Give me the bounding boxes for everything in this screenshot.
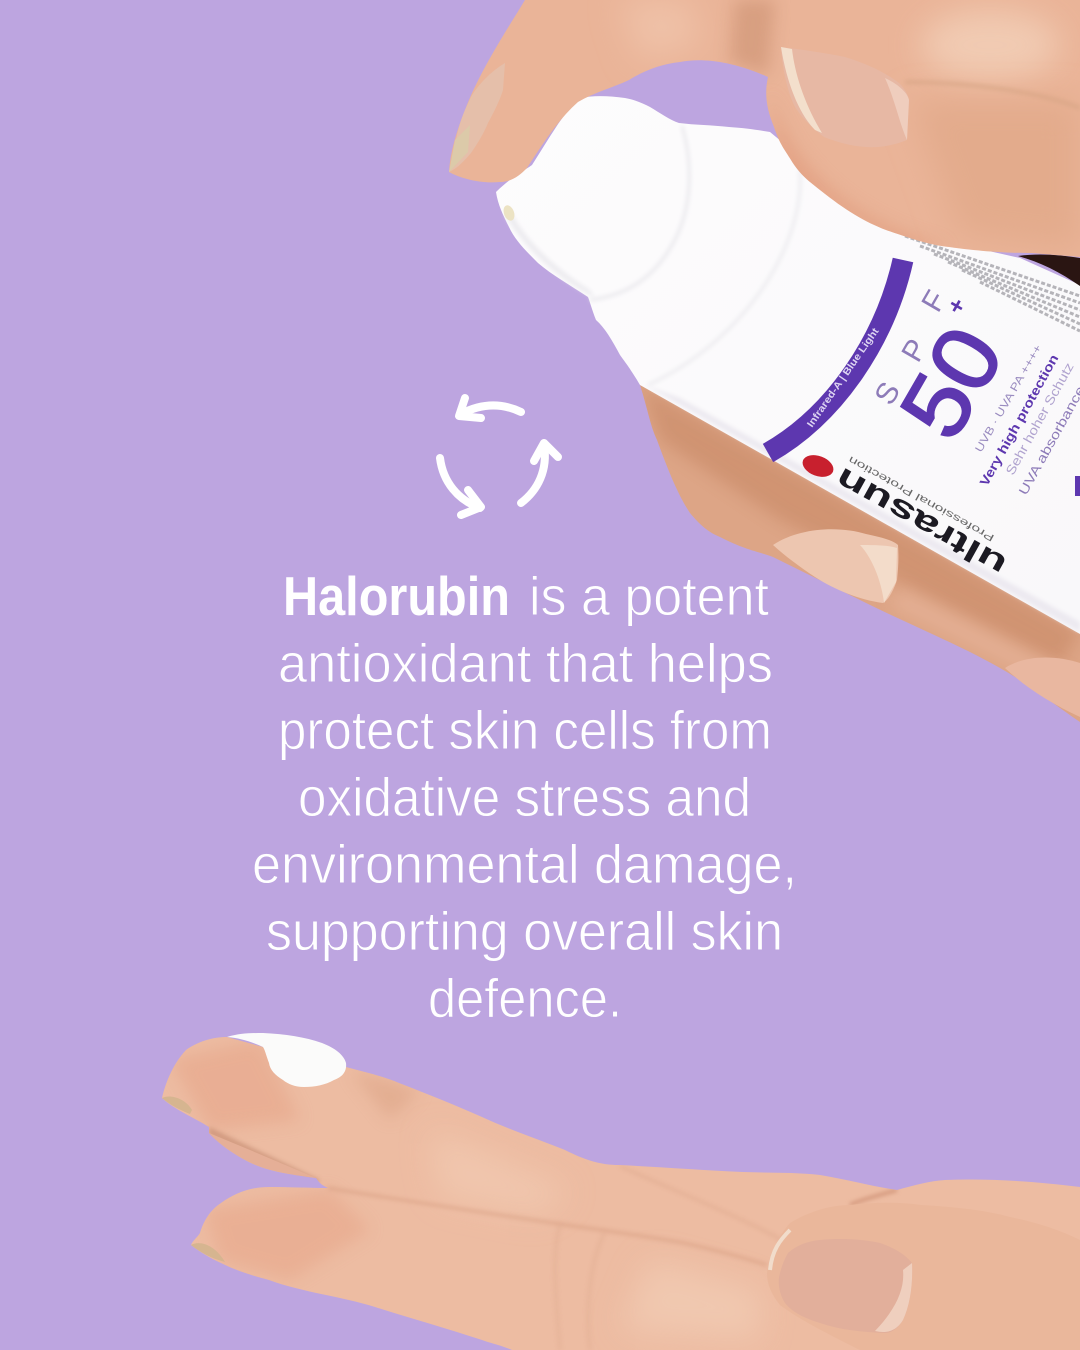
index fingertip nail <box>162 1096 192 1114</box>
arrow: right <box>521 443 558 503</box>
bottle label: ultrasun logo: ultrasun <box>829 461 1012 583</box>
arrow: bottom left <box>440 458 481 515</box>
text block: Halorubin description <box>252 565 797 1029</box>
bottle label: very high protection: Very high protection <box>977 352 1061 488</box>
bottle label: UVA absorbance: UVA absorbance <box>1016 383 1080 497</box>
line 1: is a potent <box>529 565 769 627</box>
thumb <box>767 1203 1080 1350</box>
photo: upper hand with index finger and thumb <box>449 0 1080 257</box>
hidden middle finger <box>209 1133 316 1178</box>
middle fingertip nail <box>191 1243 225 1262</box>
band text: Infrared-A | Blue Light <box>805 326 882 430</box>
index finger nail <box>449 63 505 172</box>
bottle label: F: F <box>915 285 953 318</box>
bottle label: Sehr hoher Schutz: Sehr hoher Schutz <box>1003 360 1077 477</box>
line 2: antioxidant that helps <box>278 632 773 694</box>
little finger nail <box>1005 658 1080 717</box>
bottle label: S: S <box>868 377 907 410</box>
fine print block <box>905 236 1080 331</box>
bottle label: purple band <box>768 260 903 453</box>
photo: lower open hand with cream <box>162 1033 1080 1350</box>
thumb nail <box>779 1239 912 1333</box>
bottle label: UVB UVA PA: UVB · UVA PA ++++ <box>973 343 1045 454</box>
finger nail <box>773 529 898 603</box>
bottle label: P: P <box>895 334 934 368</box>
bold term: Halorubin <box>283 565 510 627</box>
bottle label: 50: 50 <box>881 310 1023 455</box>
bottle label: professional protection: Professional Protection <box>847 453 996 543</box>
line 5: environmental damage, <box>252 833 797 895</box>
photo: white pump bottle <box>496 96 1080 634</box>
icon: three circular arrows <box>440 398 558 515</box>
line 4: oxidative stress and <box>298 766 751 828</box>
bottle label: plus: + <box>942 293 972 319</box>
thumb nail <box>781 47 909 147</box>
line 7: defence. <box>428 967 622 1029</box>
line 6: supporting overall skin <box>266 900 783 962</box>
photo: lower supporting hand <box>640 385 1080 722</box>
bottle label: red dot <box>800 451 836 481</box>
cream dollop <box>227 1033 346 1087</box>
dark gap behind thumb <box>1018 255 1080 286</box>
arrow: top <box>459 398 521 418</box>
line 3: protect skin cells from <box>278 699 772 761</box>
